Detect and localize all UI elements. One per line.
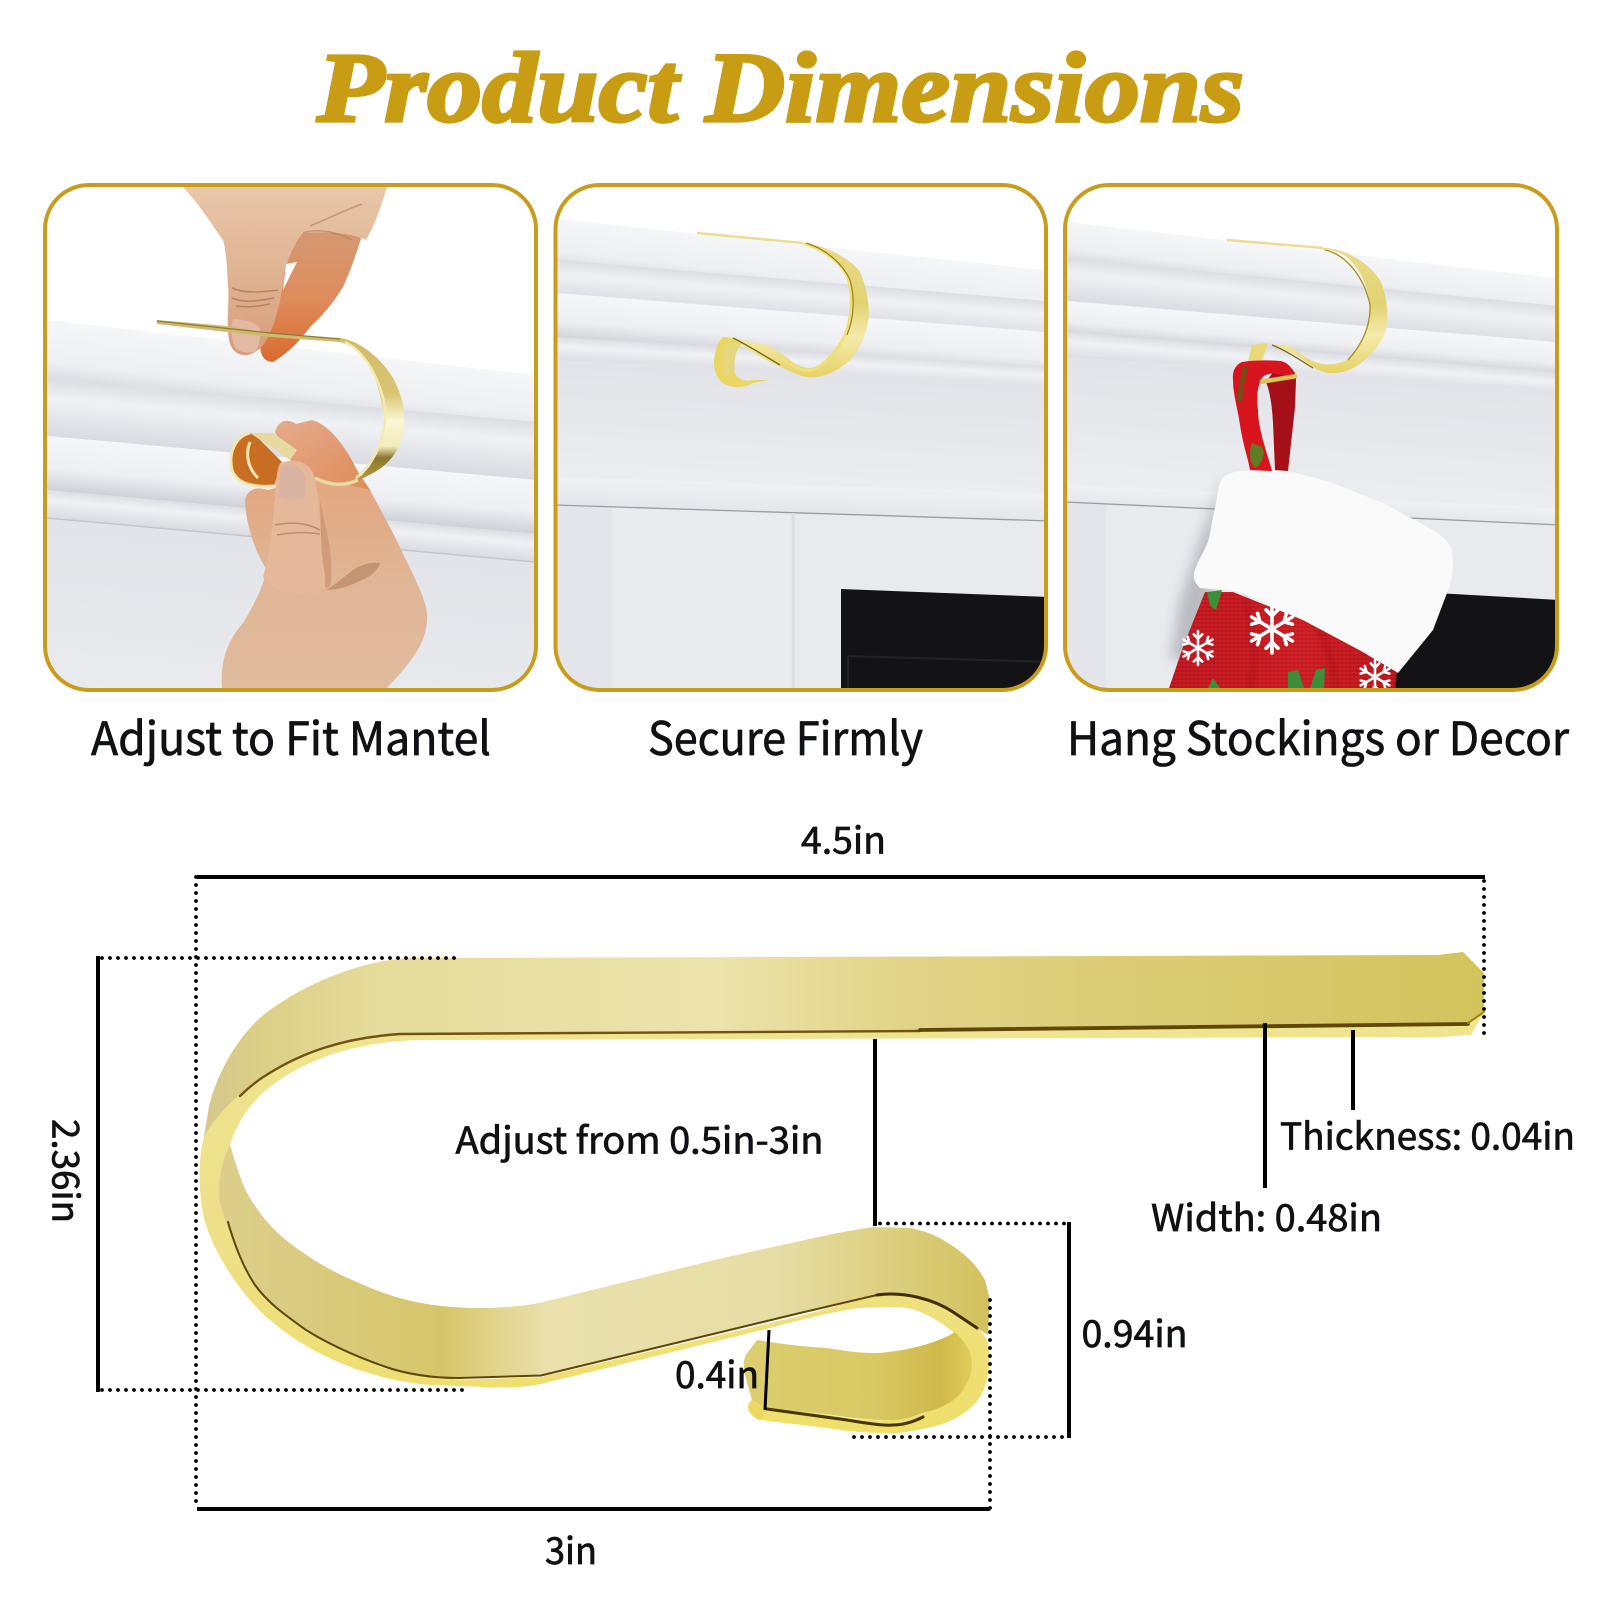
dotted extension right [988, 1300, 992, 1509]
caption: adjust: Adjust to Fit Mantel [91, 703, 491, 769]
label 0.94in: 0.94in [1082, 1304, 1188, 1358]
caption: secure: Secure Firmly [648, 703, 923, 769]
solid line [96, 956, 100, 1392]
illustration: fireplace opening [841, 589, 1050, 695]
icon: snowflake large [1252, 605, 1292, 653]
icon: snowflake left [1184, 631, 1212, 665]
solid line [1351, 1030, 1355, 1110]
solid line [873, 1039, 877, 1226]
hook upper band face [204, 952, 1484, 1137]
solid line [197, 875, 1485, 879]
label 0.4in: 0.4in [675, 1345, 759, 1399]
solid line [1263, 1023, 1267, 1188]
dotted top [880, 1222, 1066, 1225]
panel frame: hang [1065, 185, 1557, 690]
panel frame: secure [556, 185, 1046, 690]
illustration: stocking shadow [1170, 470, 1225, 660]
panel frame: adjust [45, 185, 536, 690]
solid line [765, 1330, 769, 1410]
title: Product Dimensions [316, 32, 1244, 143]
illustration: large gold hook [200, 952, 1484, 1433]
icon: snowflake bottom right [1361, 660, 1389, 694]
label 4.5in: 4.5in [801, 810, 886, 864]
panel: hang stockings or decor [1067, 222, 1555, 688]
label width: Width: 0.48in [1151, 1188, 1382, 1242]
label adjust: Adjust from 0.5in-3in [456, 1110, 824, 1164]
illustration: gold hook on mantel [1227, 240, 1387, 373]
label 2.36in: 2.36in [42, 1119, 96, 1223]
caption: hang: Hang Stockings or Decor [1067, 703, 1569, 769]
hook rim [200, 1012, 1484, 1433]
dotted extension right [1482, 881, 1486, 1035]
illustration: lower hand back [222, 420, 427, 688]
solid line [197, 1507, 990, 1511]
hook inner tail face [744, 1332, 972, 1420]
panel: secure firmly [558, 220, 1044, 688]
hook dark edge lines [228, 1012, 1484, 1425]
solid line [1067, 1222, 1071, 1438]
illustration: red hanging loop [1233, 360, 1297, 471]
dotted extension left [194, 877, 198, 1509]
icon: green leaves [1207, 590, 1325, 688]
dimension: tail 0.4in [675, 1330, 769, 1410]
illustration: red stocking [1169, 590, 1397, 688]
illustration: gold hook in hand [157, 320, 405, 486]
dotted top [102, 956, 457, 960]
illustration: lower hand thumb [263, 461, 325, 595]
illustration: upper hand [183, 187, 387, 362]
illustration: gold hook on mantel [697, 233, 869, 387]
label thickness: Thickness: 0.04in [1280, 1106, 1575, 1160]
illustration: fireplace opening [1380, 594, 1555, 688]
dotted bottom [102, 1388, 469, 1392]
dotted bottom [854, 1435, 1066, 1439]
panel: adjust to fit mantel [47, 187, 534, 688]
hook lower band face [219, 1145, 990, 1378]
hook tail tip [748, 1400, 767, 1420]
illustration: white fur cuff [1194, 471, 1453, 673]
label 3in: 3in [545, 1521, 597, 1575]
